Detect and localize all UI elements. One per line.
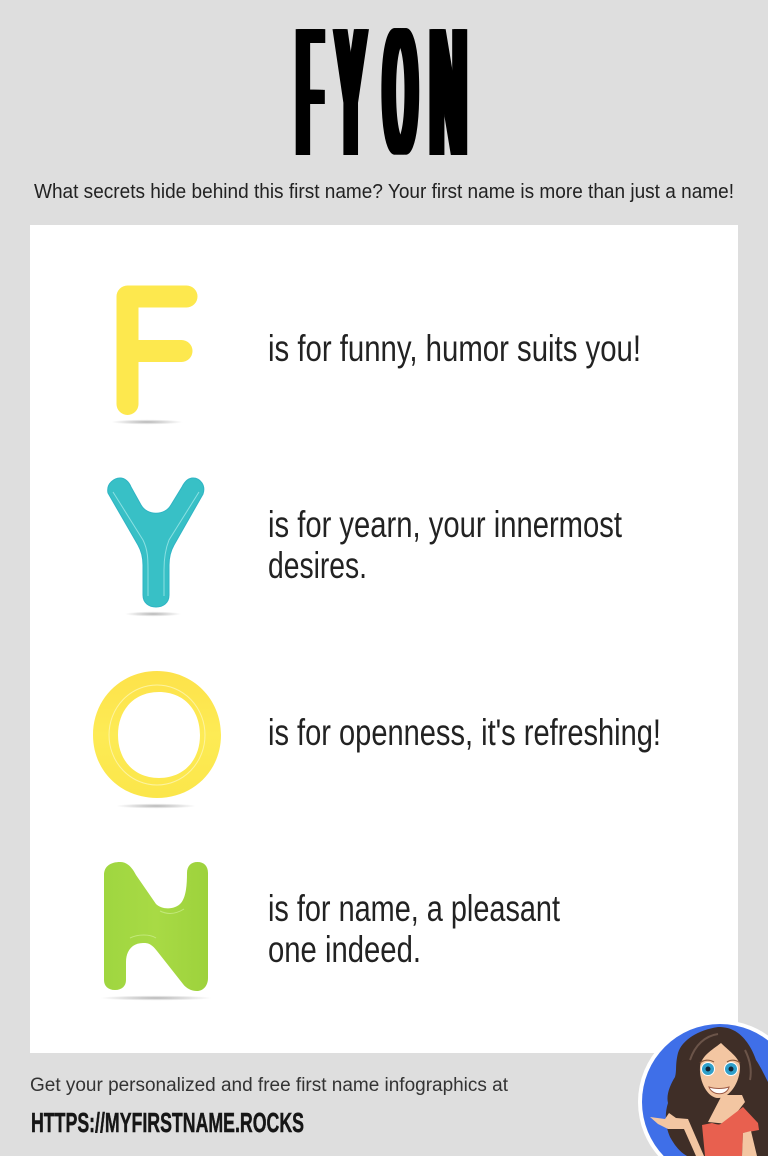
text: O: is for openness, it's refreshing!	[268, 712, 661, 753]
icon: letter F	[111, 296, 186, 424]
text: Y: is for yearn, your innermost	[268, 504, 623, 545]
text: N	[268, 888, 561, 970]
row: letter O	[93, 671, 661, 808]
row: letter F	[111, 296, 641, 424]
footer text: Get your personalized and free first name infographics at	[30, 1075, 509, 1096]
text: N: one indeed.	[268, 929, 421, 970]
text: Y	[268, 504, 623, 586]
icon: letter N	[100, 862, 212, 1000]
avatar	[638, 1020, 768, 1156]
icon: letter Y	[108, 478, 204, 616]
subtitle: What secrets hide behind this first name? Your first name is more than just a name!	[34, 181, 734, 203]
icon: letter O	[93, 671, 221, 808]
panel: letters	[30, 225, 738, 1053]
row: letter N	[100, 862, 561, 1000]
row: letter Y	[108, 478, 623, 616]
footer url: HTTPS://MYFIRSTNAME.ROCKS	[31, 1107, 304, 1138]
title	[296, 0, 468, 194]
text: Y: desires.	[268, 545, 367, 586]
text: F: is for funny, humor suits you!	[268, 328, 641, 369]
text: N: is for name, a pleasant	[268, 888, 561, 929]
